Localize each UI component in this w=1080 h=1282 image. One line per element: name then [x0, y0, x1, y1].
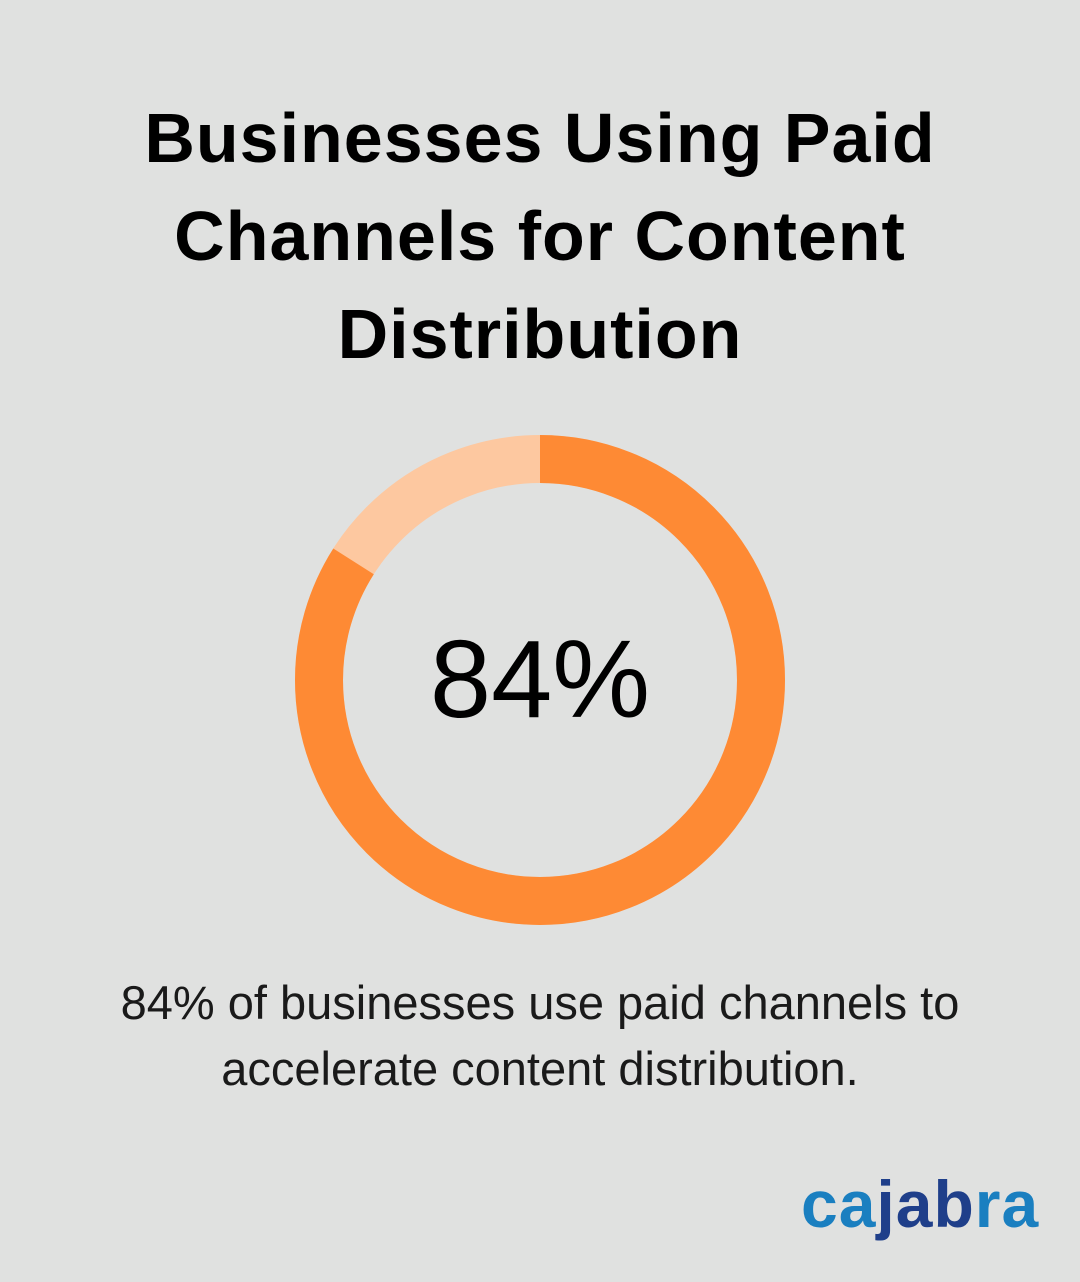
title: [144, 99, 936, 373]
title: Channels for Content: [174, 197, 906, 275]
light segment: [319, 459, 761, 901]
orange segment 84%: [319, 459, 761, 901]
title: Distribution: [338, 295, 742, 373]
caption: [121, 976, 959, 1095]
caption: accelerate content distribution.: [221, 1042, 859, 1095]
title: Businesses Using Paid: [144, 99, 936, 177]
logo: cajabra: [801, 1167, 1039, 1241]
center value: 84%: [430, 618, 650, 741]
caption: 84% of businesses use paid channels to: [121, 976, 959, 1029]
